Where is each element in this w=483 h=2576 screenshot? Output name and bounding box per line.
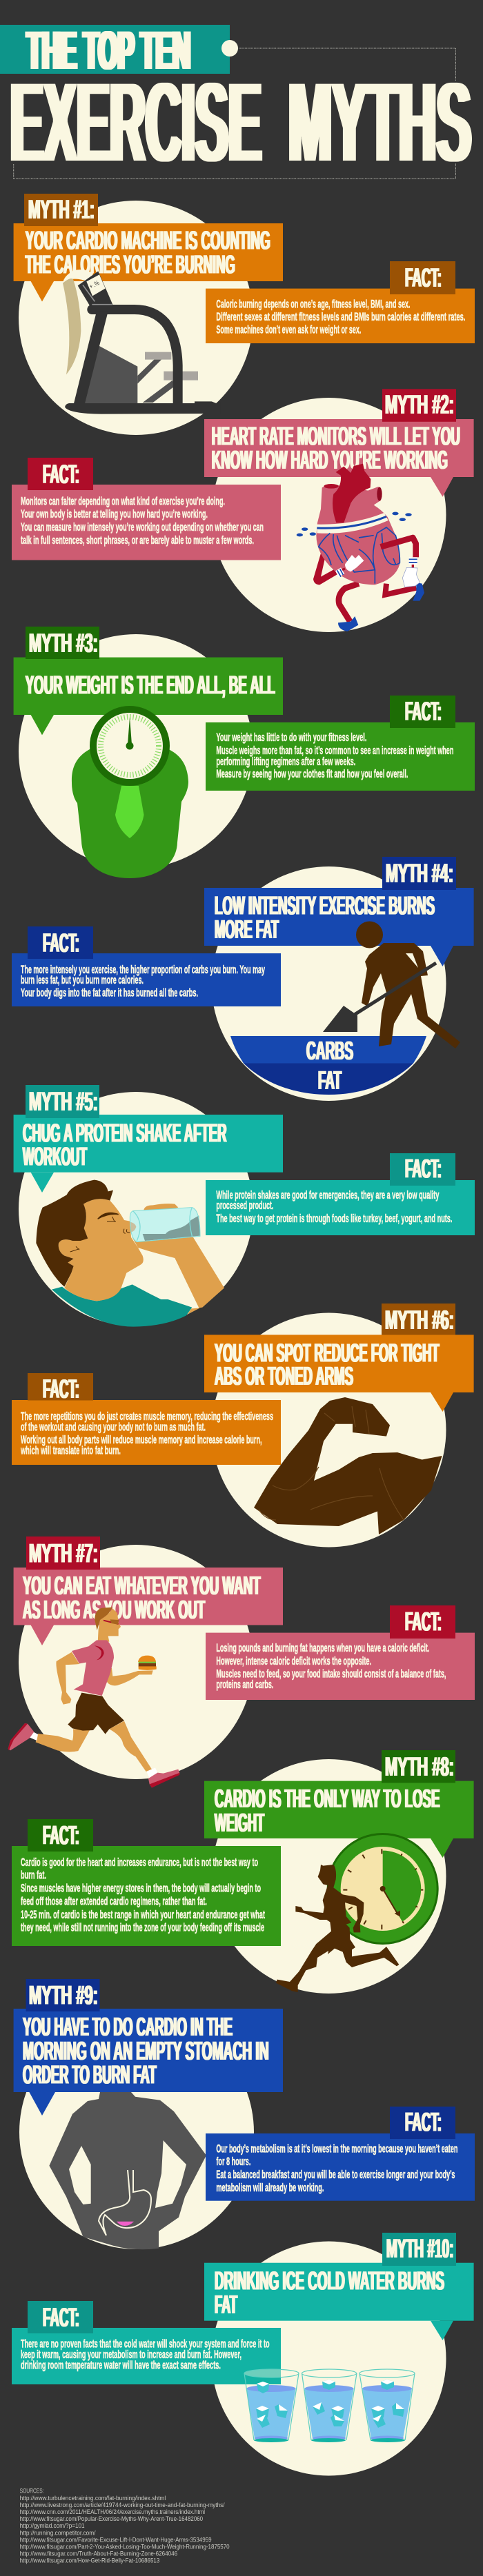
- icon: man drinking shake: [36, 1180, 224, 1327]
- fact text: Some machines don’t even ask for weight or sex.: [216, 324, 361, 336]
- fact text: metabolism will already be working.: [216, 2182, 324, 2194]
- myth title bar: [14, 1115, 283, 1173]
- fact text: Your body digs into the fat after it has burned all the carbs.: [21, 987, 198, 1000]
- myth title bar: [204, 1781, 474, 1838]
- sources list: http://www.fitsugar.com/Part-2-You-Asked-Losing-Too-Much-Weight-Running-1875570: [20, 2544, 230, 2550]
- myth label: [26, 1537, 100, 1570]
- icon: digging figure: [323, 921, 460, 1048]
- icon: torso with empty stomach: [49, 2092, 206, 2249]
- fact box: [12, 1846, 281, 1946]
- myth title bar: [204, 888, 474, 946]
- fact text: which will translate into fat burn.: [20, 1445, 121, 1457]
- panel: myth 6: FACT:: [43, 1375, 79, 1404]
- fact text: [216, 2143, 457, 2194]
- fact text: drinking room temperature water will have the exact same effects.: [21, 2360, 221, 2372]
- panel: myth 1: [14, 194, 475, 435]
- icon: weighing scale: [72, 706, 188, 878]
- fact box: [206, 1633, 475, 1700]
- sources list: http://gymlad.com/?p=101: [20, 2522, 85, 2530]
- myth number: MYTH #9:: [29, 1981, 98, 2011]
- fact text: [21, 495, 264, 547]
- fact text: [21, 2338, 270, 2372]
- fact text: burn less fat, but you burn more calories.: [21, 974, 144, 986]
- panel: myth 9: [14, 1979, 475, 2249]
- myth title text: [215, 2267, 444, 2320]
- myth title text: FAT: [215, 2291, 237, 2320]
- fact label: [390, 2107, 455, 2139]
- fact text: Your own body is better at telling you how hard you’re working.: [21, 508, 208, 520]
- myth number: MYTH #1:: [28, 195, 95, 225]
- myth title text: [23, 1119, 226, 1172]
- icon: glass three: [359, 2369, 415, 2442]
- callout tail: [31, 281, 54, 302]
- fact text: [21, 1856, 265, 1934]
- fact text: for 8 hours.: [216, 2156, 250, 2168]
- panel: myth 5: CHUG A PROTEIN SHAKE AFTER: [23, 1119, 226, 1148]
- background circle: [19, 2015, 254, 2249]
- carbs and fat bowl: CARBS: [306, 1037, 353, 1066]
- fact label: [390, 261, 455, 294]
- fact text: [216, 1642, 446, 1691]
- panel: myth 2: FACT:: [43, 460, 79, 489]
- background circle: [211, 866, 446, 1101]
- title: [0, 19, 471, 187]
- fact text: Monitors can falter depending on what kind of exercise you’re doing.: [21, 495, 225, 507]
- panel: myth 10: FACT:: [43, 2303, 79, 2333]
- callout tail: [31, 1173, 54, 1193]
- sources list: SOURCES:: [20, 2488, 44, 2495]
- fact text: [20, 1410, 273, 1457]
- icon: running heart: [297, 464, 424, 631]
- myth title bar: [14, 1568, 283, 1625]
- myth label: [382, 2233, 456, 2266]
- fact text: proteins and carbs.: [216, 1679, 273, 1691]
- fact text: You can measure how intensely you’re working out depending on whether you can: [21, 521, 264, 534]
- banner dot: [221, 40, 238, 57]
- fact text: [216, 298, 465, 336]
- panel: myth 4: FACT:: [43, 929, 79, 958]
- fact text: they need, while still not running into the zone of your body feeding off its muscle: [21, 1922, 264, 1934]
- myth title text: WEIGHT: [215, 1809, 264, 1838]
- sources list: http://www.livestrong.com/article/419744-working-out-time-and-fat-burning-myths/: [20, 2502, 225, 2509]
- fact text: [216, 1189, 452, 1225]
- fact label: [390, 1153, 455, 1186]
- panel: myth 3: [14, 627, 475, 878]
- myth title bar: [14, 658, 283, 715]
- myth number: MYTH #7:: [29, 1539, 98, 1569]
- callout tail: [431, 477, 453, 497]
- myth title text: AS LONG AS YOU WORK OUT: [23, 1596, 205, 1625]
- fact label: [28, 458, 93, 490]
- icon: clock and runner: [276, 1833, 439, 1992]
- myth title text: [23, 1572, 261, 1625]
- myth title text: [215, 1785, 440, 1838]
- fact text: The more repetitions you do just creates muscle memory, reducing the effectiveness: [21, 1410, 273, 1423]
- myth title bar: [14, 2009, 283, 2092]
- myth title text: YOU HAVE TO DO CARDIO IN THE: [23, 2013, 233, 2042]
- myth title text: ORDER TO BURN FAT: [23, 2061, 157, 2090]
- panel: myth 7: FACT:: [405, 1608, 442, 1637]
- myth number: MYTH #5:: [29, 1087, 98, 1117]
- sources list: http://www.cnn.com/2011/HEALTH/06/24/exercise.myths.trainers/index.html: [20, 2508, 205, 2516]
- myth title text: [26, 226, 270, 279]
- background circle: [19, 1545, 253, 1779]
- panel: myth 9: FACT:: [405, 2108, 442, 2138]
- myth title text: [215, 1339, 439, 1391]
- panel: myth 4: [12, 857, 474, 1101]
- myth title text: THE CALORIES YOU’RE BURNING: [26, 250, 235, 279]
- fact text: performing lifting regimens after a few weeks.: [216, 755, 355, 768]
- fact text: Cardio is good for the heart and increases endurance, but is not the best way to: [21, 1856, 258, 1869]
- fact box: [206, 289, 475, 343]
- fact box: [12, 953, 281, 1006]
- icon: treadmill: + .%: [88, 279, 101, 291]
- panel: myth 1: FACT:: [405, 263, 442, 293]
- myth label: [382, 389, 456, 422]
- myth label: [26, 1085, 99, 1118]
- fact text: burn fat.: [21, 1869, 46, 1882]
- myth title text: [215, 891, 435, 944]
- sources list: http://www.fitsugar.com/Favorite-Excuse-Lift-I-Dont-Want-Huge-Arms-3534959: [20, 2536, 212, 2544]
- myth title text: [23, 2013, 269, 2090]
- panel: myth 2: [12, 389, 474, 632]
- myth title bar: [204, 1335, 474, 1392]
- title: THE TOP TEN: [27, 19, 190, 81]
- fact text: [216, 731, 453, 780]
- fact text: keep it warm, causing your metabolism to increase and burn fat. However,: [21, 2349, 241, 2361]
- panel: myth 3: FACT:: [405, 697, 442, 727]
- callout tail: [31, 715, 54, 735]
- background circle: [211, 1312, 446, 1547]
- fact label: [390, 1605, 455, 1639]
- background circle: [19, 201, 253, 435]
- myth label: [26, 1979, 99, 2011]
- fact text: [21, 964, 265, 1000]
- teal title banner: [0, 25, 230, 74]
- sources list: [20, 2488, 230, 2565]
- panel: myth 6: [12, 1304, 474, 1547]
- myth label: [26, 627, 99, 659]
- fact text: The more intensely you exercise, the higher proportion of carbs you burn. You may: [21, 964, 265, 976]
- fact text: of the workout and causing your body not to burn as much fat.: [21, 1421, 206, 1434]
- panel: myth 8: [12, 1750, 474, 1994]
- panel: myth 10: [12, 2233, 474, 2476]
- fact label: [28, 926, 93, 959]
- myth title bar: [14, 223, 283, 281]
- icon: runner with burger: [8, 1608, 180, 1787]
- myth title bar: [204, 2263, 474, 2321]
- sources list: http://www.turbulencetraining.com/fat-burning/index.shtml: [20, 2495, 166, 2502]
- myth title text: [212, 423, 460, 475]
- fact box: [206, 722, 475, 791]
- myth label: [382, 1304, 455, 1335]
- callout tail: [431, 2321, 453, 2340]
- myth label: [382, 857, 456, 890]
- fact label: [28, 1373, 93, 1401]
- fact box: [206, 2133, 475, 2201]
- callout tail: [29, 2092, 55, 2116]
- background circle: [211, 2242, 446, 2476]
- fact text: processed product.: [216, 1199, 273, 1212]
- fact text: Since muscles have higher energy stores in them, the body will actually begin to: [21, 1883, 261, 1895]
- myth title text: WORKOUT: [23, 1143, 87, 1172]
- background circle: [19, 634, 253, 869]
- panel: myth 5: [14, 1085, 475, 1327]
- fact text: Your weight has little to do with your fitness level.: [216, 731, 366, 744]
- carbs and fat bowl: FAT: [318, 1066, 342, 1095]
- myth label: [24, 194, 98, 226]
- icon: glass one: [244, 2369, 299, 2442]
- myth number: MYTH #3:: [29, 629, 98, 658]
- myth label: [382, 1750, 455, 1783]
- fact text: talk in full sentences, short phrases, or are barely able to muster a few words.: [21, 534, 254, 547]
- background circle: [19, 1092, 253, 1326]
- fact box: [12, 2328, 281, 2384]
- background circle: [211, 398, 446, 632]
- panel: myth 8: FACT:: [43, 1821, 79, 1851]
- callout tail: [431, 1392, 453, 1412]
- fact text: 10-25 min. of cardio is the best range in which your heart and endurance get what: [21, 1909, 265, 1921]
- callout tail: [431, 946, 453, 966]
- icon: glass two: [302, 2369, 357, 2442]
- fact text: There are no proven facts that the cold water will shock your system and force it to: [21, 2338, 270, 2351]
- sources list: http://running.competitor.com/: [20, 2529, 96, 2537]
- fact text: Working out all body parts will reduce muscle memory and increase calorie burn,: [21, 1434, 262, 1446]
- callout tail: [31, 1625, 54, 1645]
- fact box: [12, 1400, 281, 1465]
- fact text: feed off those after extended cardio regimens, rather than fat.: [21, 1896, 207, 1908]
- callout tail: [431, 1838, 453, 1858]
- icon: flexed arm: [254, 1397, 442, 1534]
- panel: myth 5: FACT:: [405, 1155, 442, 1184]
- myth title bar: [204, 419, 474, 477]
- myth title text: MORE FAT: [215, 915, 279, 944]
- sources list: http://www.fitsugar.com/Popular-Exercise-Myths-Why-Arent-True-16482060: [20, 2515, 203, 2523]
- sources list: http://www.fitsugar.com/Truth-About-Fat-Burning-Zone-6264046: [20, 2550, 177, 2558]
- fact box: [12, 485, 281, 560]
- fact label: [28, 1819, 93, 1852]
- panel: myth 7: [8, 1537, 475, 1787]
- background circle: [211, 1759, 446, 1994]
- fact box: [206, 1180, 475, 1235]
- fact label: [28, 2301, 93, 2333]
- carbs and fat bowl: [230, 1036, 426, 1095]
- decorative dotted frame: [14, 48, 455, 179]
- sources list: http://www.fitsugar.com/How-Get-Rid-Belly-Fat-10686513: [20, 2557, 159, 2565]
- icon: treadmill: [63, 270, 221, 414]
- fact label: [390, 696, 455, 728]
